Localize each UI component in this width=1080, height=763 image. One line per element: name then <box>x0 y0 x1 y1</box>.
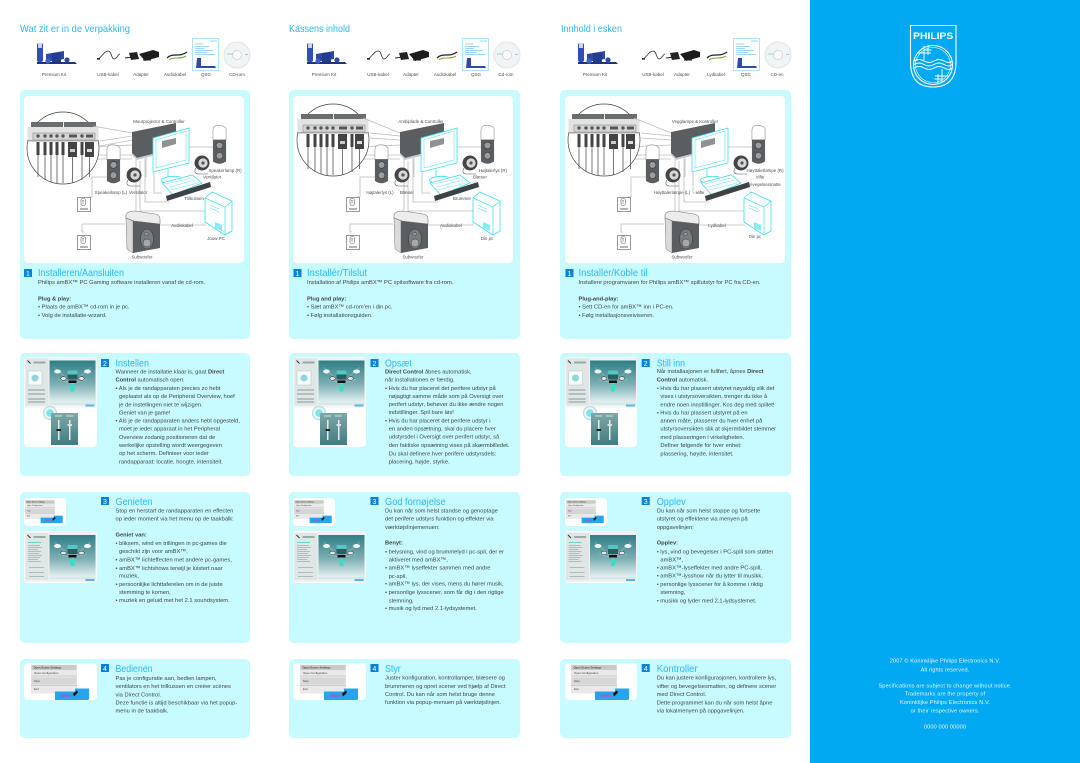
instructions: • Hvis du har plassert utstyret nøyaktig slik det <box>657 386 775 392</box>
instructions <box>385 507 504 612</box>
heading: Styr <box>385 663 401 675</box>
panel: god fornojelse column 2 <box>289 492 520 643</box>
instructions: • amBX™ lichteffecten met andere pc-games, <box>116 557 232 563</box>
instructions: stemming te komen, <box>119 590 171 596</box>
instructions <box>657 368 776 457</box>
badge 4: 4 <box>103 666 107 673</box>
heading: Opsæt <box>385 358 412 370</box>
panel: installeren column 1 <box>20 90 250 339</box>
instructions: Overview zodanig positioneren dat de <box>119 435 215 441</box>
icon: Philips shield logo: PHILIPS <box>913 31 953 41</box>
instructions: • Hvis du har plassert utstyret på en <box>657 410 748 417</box>
panel: still inn column 3 <box>560 353 791 476</box>
instructions: werkelijke opstelling wordt weergegeven <box>118 443 222 449</box>
instructions: Control automatisk. <box>657 377 709 383</box>
screenshot <box>293 357 366 447</box>
connection diagram column 1: Subwoofer <box>132 254 153 260</box>
instructions: Pas je configuratie aan, bedien lampen, <box>116 676 217 682</box>
column 2 contents row: QSG <box>471 72 481 77</box>
install text: • Plaats de amBX™ cd-rom in je pc. <box>38 304 130 310</box>
column 2 contents row <box>307 38 520 77</box>
icon: Philips shield logo <box>910 26 956 87</box>
install text: Installere programvaren for Philips amBX™ spillutstyr for PC fra CD-en. <box>578 280 761 286</box>
column 1 contents row: Audiokabel <box>164 72 186 77</box>
column 3 contents row <box>578 38 791 77</box>
direct control screenshot <box>24 531 97 583</box>
instructions: med plasseringen i virkeligheten. <box>660 435 745 441</box>
instructions: ventilators en het trilkussen en creëer scènes <box>116 684 231 690</box>
instructions: værktøjslinjemenuen: <box>385 525 440 531</box>
connection diagram column 2: Din pc <box>481 236 494 241</box>
badge 1: 1 <box>296 271 300 278</box>
instructions: Dette programmet kan du når som helst åpne <box>657 699 772 706</box>
instructions <box>657 676 777 714</box>
column 3 heading: Innhold i esken <box>561 23 622 35</box>
instructions: stemning, <box>660 590 686 596</box>
column 2 heading: Kassens inhold <box>289 23 350 35</box>
connection diagram column 1: Speakerlamp (R) <box>208 168 242 173</box>
instructions: Juster konfiguration, kontrollamper, blæsere og <box>385 676 505 682</box>
column 3 contents row: Lydkabel <box>707 72 725 77</box>
badge 4 <box>370 664 378 673</box>
badge 3 <box>370 497 378 506</box>
menu screenshot <box>293 663 366 700</box>
column 1 contents row: QSG <box>201 72 211 77</box>
panel: opsaet column 2 <box>289 353 520 476</box>
instructions: • personlige lysscener for å komme i riktig <box>657 581 763 588</box>
instructions: udstyrsdel i Oversigt over perifert udstyr, så <box>389 434 500 441</box>
connection diagram column 2: Blæser <box>473 174 487 180</box>
connection diagram column 2 <box>297 104 508 260</box>
panel: installer column 3 <box>560 90 791 339</box>
column 2 contents row: Premium Kit <box>312 72 337 77</box>
instructions: endre noen innstillinger. Kos deg med spillet! <box>660 402 775 408</box>
instructions: utstyrsoversikten slik at skjermbildet stemmer <box>660 427 776 433</box>
instructions: • amBX™ lys, der vises, mens du hører musik, <box>385 582 504 588</box>
instructions: moet je ieder apparaat in het Peripheral <box>119 427 220 433</box>
heading: Installeren/Aansluiten <box>38 267 124 279</box>
panel: installer column 2 <box>289 90 520 339</box>
badge 2 <box>370 359 378 368</box>
heading: God fornøjelse <box>385 496 446 508</box>
copyright text: Koninklijke Philips Electronics N.V. <box>900 700 990 706</box>
connection diagram column 2: Brummer <box>453 196 472 201</box>
instructions: Definer følgende for hver enhet: <box>660 443 742 449</box>
instructions: via lokalmenyen på oppgavelinjen. <box>657 707 745 714</box>
install text: • Sett CD-en for amBX™ inn i PC-en. <box>578 304 674 310</box>
instructions: Opplev: <box>657 541 678 547</box>
panel: opplev column 3 <box>560 492 791 643</box>
copyright text: 2007 © Koninklijke Philips Electronics N.V. <box>890 658 1001 665</box>
sidebar background <box>810 0 1080 763</box>
badge 3 <box>642 497 650 506</box>
instructions: brummeren og opret scener ved hjælp af Direct <box>385 684 506 690</box>
instructions: oppgavelinjen: <box>657 525 694 531</box>
instructions: nøjagtigt samme måde som på Oversigt over <box>389 393 504 400</box>
menu screenshot <box>565 663 637 700</box>
instructions <box>116 369 240 465</box>
install text: • Følg installationsguiden. <box>307 313 373 319</box>
connection diagram column 1 <box>27 112 242 260</box>
instructions: Direct Control åbnes automatisk, <box>385 368 472 375</box>
menu screenshot <box>24 498 66 526</box>
instructions: • amBX™-lyseffekter med andre PC-spill, <box>657 565 762 571</box>
connection diagram column 1: Speakerlamp (L) <box>95 190 128 195</box>
instructions: Du skal definere hver perifere udstyrsdels: <box>389 451 497 457</box>
copyright text: 0000 000 00000 <box>924 724 966 730</box>
instructions: via Direct Control. <box>116 692 162 698</box>
install text <box>578 280 761 319</box>
instructions: menu in de taakbalk. <box>116 709 169 715</box>
install text: Plug & play: <box>38 296 71 302</box>
instructions: det perifere udstyrs funktion og effekter via <box>385 517 494 523</box>
heading: Bedienen <box>116 663 153 675</box>
badge 3: 3 <box>373 499 377 506</box>
instructions: den faktiske opsætning vises på skærmbilledet. <box>389 442 510 449</box>
badge 1 <box>566 269 574 278</box>
connection diagram column 3: Høyttalerlampe (R) <box>746 168 784 173</box>
instructions: perifert udstyr, behøver du ikke ændre nogen <box>389 402 503 408</box>
instructions: med Direct Control. <box>657 692 707 698</box>
connection diagram column 3: Subwoofer <box>672 254 693 260</box>
instructions <box>657 507 774 604</box>
copyright text <box>878 658 1012 730</box>
panel: instellen column 1 <box>20 353 250 476</box>
heading: Installer/Koble til <box>578 267 648 279</box>
connection diagram column 2: Ambiplade & Controller <box>398 119 444 124</box>
direct control screenshot <box>565 531 637 583</box>
direct control screenshot <box>293 531 366 583</box>
instructions: Du kan justere konfigurasjonen, kontrollere lys, <box>657 676 777 682</box>
connection diagram column 3: Vifte <box>696 190 705 195</box>
column 3 contents row: USB-kabel <box>642 72 664 77</box>
badge 3: 3 <box>644 499 648 506</box>
instructions: Geniet van je game! <box>119 411 171 417</box>
connection diagram column 3: Høyttalerlampe (L) <box>654 190 691 195</box>
instructions: • Als je de randapparaten anders hebt opgesteld, <box>116 419 240 425</box>
connection diagram column 2: Subwoofer <box>402 254 424 260</box>
instructions: • lys, vind og bevegelser i PC-spill som støtter <box>657 549 774 555</box>
badge 1: 1 <box>26 271 30 278</box>
instructions: je de instellingen niet te wijzigen. <box>118 402 203 408</box>
panel: styr column 2 <box>289 659 520 738</box>
connection diagram column 3: Din pc <box>749 234 762 239</box>
instructions: amBX™, <box>660 557 684 563</box>
screenshot <box>565 357 637 447</box>
instructions: Stop en herstart de randapparaten en effecten <box>116 508 233 514</box>
column 3 contents row: Premium Kit <box>583 72 608 77</box>
instructions: • amBX™-lysshow når du lytter til musikk, <box>657 572 763 579</box>
column 3 contents row: Adapter <box>674 72 690 77</box>
instructions: vises i utstyrsoversikten, trenger du ikke å <box>660 393 768 400</box>
instructions: funktion via popup-menuen på værktøjslinjen. <box>385 699 501 706</box>
panel: bedienen column 1 <box>20 659 250 738</box>
instructions: • musik og lyd med 2.1-lydsystemet. <box>385 606 477 612</box>
heading: Genieten <box>116 496 153 508</box>
badge 2: 2 <box>373 361 377 368</box>
instructions <box>385 676 506 706</box>
heading: Kontroller <box>657 663 698 675</box>
menu screenshot <box>565 498 607 526</box>
install text: Philips amBX™ PC Gaming software installeren vanaf de cd-rom. <box>38 280 206 286</box>
instructions: muziek, <box>119 574 139 580</box>
instructions: geplaatst als op de Peripheral Overview, hoef <box>119 394 235 400</box>
column 1 contents row <box>37 38 250 77</box>
install text: Installation af Philips amBX™ PC spilsoftware fra cd-rom. <box>307 280 454 286</box>
instructions: vifter og bevegelsesmatten, og definere scener <box>657 684 776 690</box>
instructions <box>385 368 510 466</box>
connection diagram column 1: Ventilator <box>129 190 148 195</box>
connection diagram column 1: Ventilator <box>203 174 222 180</box>
heading: Instellen <box>116 358 149 370</box>
install text <box>38 280 206 319</box>
badge 2 <box>101 359 109 368</box>
instructions: • persoonlijke lichttaferelen om in de juiste <box>116 582 223 588</box>
connection diagram column 1: Jouw PC <box>207 236 225 241</box>
connection diagram column 3 <box>568 104 784 260</box>
copyright text: Specifications are subject to change without notice. <box>878 684 1012 690</box>
instructions: randapparaat: locatie, hoogte, intensiteit. <box>119 459 223 465</box>
heading: Still inn <box>657 358 685 370</box>
connection diagram column 3: Bevegelsesmatte <box>747 182 781 187</box>
copyright text: All rights reserved. <box>921 667 970 673</box>
instructions: Benyt: <box>385 541 403 547</box>
instructions <box>116 508 234 604</box>
badge 1 <box>294 269 302 278</box>
badge 2: 2 <box>103 361 107 368</box>
connection diagram column 3: Vifte <box>756 174 765 180</box>
instructions: op het scherm. Definieer voor ieder <box>119 451 209 457</box>
badge 3 <box>101 497 109 506</box>
panel: kontroller column 3 <box>560 659 791 738</box>
instructions: Når installasjonen er fullført, åpnes Direct <box>657 368 764 375</box>
instructions: • personlige lysscener, som får dig i den rigtige <box>385 589 504 596</box>
instructions: Du kan når som helst stoppe og fortsette <box>657 507 760 514</box>
column 1 contents row: Adapter <box>133 72 149 77</box>
install text: • Følg installasjonsveiviseren. <box>578 313 654 319</box>
connection diagram column 1: Muurprojector & Controller <box>133 119 185 124</box>
connection diagram column 2: Blæser <box>400 190 414 195</box>
instructions: Du kan når som helst standse og genoptage <box>385 507 498 514</box>
instructions: når installationen er færdig. <box>385 376 455 383</box>
badge 4: 4 <box>644 666 648 673</box>
column 1 heading: Wat zit er in de verpakking <box>20 23 130 35</box>
instructions: plassering, høyde, intensitet. <box>660 451 734 457</box>
column 3 contents row: QSG <box>741 72 751 77</box>
install text: • Volg de installatie-wizard. <box>38 313 107 319</box>
copyright text: Trademarks are the property of <box>905 692 986 698</box>
instructions: en anden opsætning, skal du placere hver <box>389 427 496 433</box>
instructions: • amBX™ lyseffekter sammen med andre <box>385 566 490 572</box>
column 3 contents row: CD-en <box>770 72 784 77</box>
heading: Opplev <box>657 496 686 508</box>
instructions: aktiveret med amBX™, <box>389 558 448 564</box>
heading: Installér/Tilslut <box>307 267 367 279</box>
instructions: Wanneer de installatie klaar is, gaat Direct <box>116 369 224 375</box>
install text: • Sæt amBX™ cd-rom'en i din pc. <box>307 304 393 310</box>
connection diagram column 3: Lydkabel <box>708 223 726 228</box>
install text: Plug-and-play: <box>578 296 619 302</box>
menu screenshot <box>24 663 97 700</box>
instructions: • Als je de randapparaten precies zo hebt <box>116 386 221 392</box>
instructions: Control. Du kan når som helst bruge denne <box>385 691 495 698</box>
instructions: geschikt zijn voor amBX™, <box>119 549 188 555</box>
instructions: • Hvis du har placeret det perifere udstyr på <box>385 385 496 392</box>
instructions: indstillinger. Spil bare løs! <box>389 410 454 416</box>
instructions: • belysning, vind og brummelyd i pc-spil, der er <box>385 549 504 555</box>
badge 4 <box>642 664 650 673</box>
badge 2: 2 <box>644 361 648 368</box>
column 2 contents row: Audiokabel <box>434 72 456 77</box>
instructions: • musikk og lyder med 2.1-lydsystemet. <box>657 598 757 604</box>
column 2 contents row: Adapter <box>403 72 419 77</box>
column 1 contents row: USB-kabel <box>97 72 119 77</box>
install text <box>307 280 454 319</box>
panel: genieten column 1 <box>20 492 250 643</box>
connection diagram column 2: Højtalerlys (R) <box>479 168 508 173</box>
instructions: • amBX™ lichtshows terwijl je luistert naar <box>116 566 223 572</box>
instructions: pc-spil, <box>389 574 407 580</box>
connection diagram column 3: Vegglampe & Kontroller <box>672 119 719 124</box>
instructions <box>116 676 237 715</box>
badge 1: 1 <box>568 271 572 278</box>
connection diagram column 2: Højtalerlys (L) <box>366 190 394 195</box>
copyright text: or their respective owners. <box>911 708 980 714</box>
instructions: utstyret og effektene via menyen på <box>657 516 748 523</box>
instructions: • bliksem, wind en trillingen in pc-games die <box>116 541 227 547</box>
instructions: placering, højde, styrke. <box>389 460 450 466</box>
badge 4 <box>101 664 109 673</box>
column 2 contents row: Cd-rom <box>498 72 514 77</box>
connection diagram column 1: Audiokabel <box>171 223 193 228</box>
connection diagram column 1: Trilkussen <box>184 196 204 201</box>
column 2 contents row: USB-kabel <box>367 72 389 77</box>
instructions: stemning, <box>389 599 414 605</box>
instructions: • muziek en geluid met het 2.1 soundsystem. <box>116 598 230 604</box>
badge 4: 4 <box>373 666 377 673</box>
connection diagram column 2: Audiokabel <box>440 223 462 228</box>
screenshot <box>24 357 97 447</box>
column 1 contents row: Premium Kit <box>42 72 67 77</box>
badge 2 <box>642 359 650 368</box>
instructions: • Hvis du har placeret det perifere udstyr i <box>385 418 491 424</box>
badge 3: 3 <box>103 499 107 506</box>
instructions: op ieder moment via het menu op de taakbalk: <box>116 516 234 522</box>
instructions: Geniet van: <box>116 533 147 539</box>
menu screenshot <box>293 498 335 526</box>
instructions: Control automatisch open. <box>116 378 185 384</box>
badge 1 <box>24 269 32 278</box>
column 1 contents row: CD-rom <box>229 72 245 77</box>
instructions: Deze functie is altijd beschikbaar via het popup- <box>116 700 237 706</box>
instructions: annen måte, plasserer du hver enhet på <box>660 418 763 425</box>
install text: Plug and play: <box>307 296 346 302</box>
